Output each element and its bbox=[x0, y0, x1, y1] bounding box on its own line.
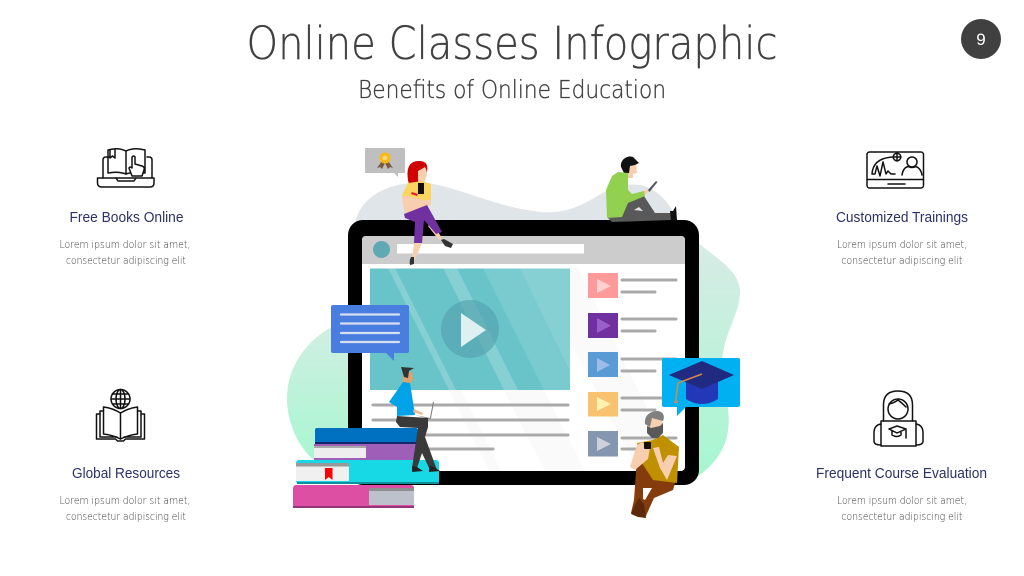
playlist item 2 bbox=[588, 313, 676, 338]
body text bbox=[60, 239, 190, 267]
heading: Free Books Online bbox=[70, 209, 184, 226]
panel: frequent course evaluation bbox=[816, 391, 987, 523]
page number badge bbox=[961, 19, 1001, 59]
book: blue bbox=[315, 428, 418, 444]
tablet bbox=[348, 220, 699, 485]
heading: Customized Trainings bbox=[836, 209, 968, 226]
playlist bbox=[588, 273, 676, 456]
playlist item 3 bbox=[588, 352, 676, 377]
tablet frame bbox=[348, 220, 699, 485]
icon: book on laptop bbox=[98, 149, 154, 187]
body text: consectetur adipiscing elit bbox=[66, 511, 186, 523]
book: pink bbox=[293, 485, 414, 508]
body text bbox=[60, 495, 190, 523]
panel: customized trainings bbox=[836, 152, 968, 267]
body text: Lorem ipsum dolor sit amet, bbox=[837, 239, 967, 251]
tablet screen bbox=[362, 236, 685, 471]
body text: consectetur adipiscing elit bbox=[842, 255, 962, 267]
background blob: grey bbox=[355, 183, 680, 225]
body text bbox=[837, 495, 967, 523]
body text bbox=[837, 239, 967, 267]
panel: free books online bbox=[60, 149, 190, 267]
body text: consectetur adipiscing elit bbox=[66, 255, 186, 267]
browser bar bbox=[362, 236, 685, 264]
body text: Lorem ipsum dolor sit amet, bbox=[837, 495, 967, 507]
title: Online Classes Infographic bbox=[246, 17, 778, 70]
body text: Lorem ipsum dolor sit amet, bbox=[60, 495, 190, 507]
book: purple bbox=[314, 444, 416, 460]
person: bearded man with phone bbox=[630, 411, 679, 518]
playlist item 1 bbox=[588, 273, 676, 298]
book: cyan with bookmark bbox=[296, 460, 439, 484]
speech bubble: medal bbox=[365, 148, 405, 177]
heading: Global Resources bbox=[72, 465, 180, 482]
background blob: green left bbox=[287, 318, 352, 470]
play button bbox=[441, 300, 499, 358]
video panel bbox=[370, 268, 581, 390]
icon: student with laptop bbox=[874, 391, 923, 446]
panel: global resources bbox=[60, 390, 190, 523]
page number badge: 9 bbox=[976, 30, 986, 49]
book stack bbox=[293, 428, 439, 508]
body text: consectetur adipiscing elit bbox=[842, 511, 962, 523]
icon: monitor with trainer bbox=[867, 152, 924, 188]
person: man with laptop on books bbox=[389, 367, 440, 472]
illustration: online class scene bbox=[287, 148, 740, 518]
person: woman on tablet bbox=[402, 161, 453, 265]
speech bubble: graduation cap bbox=[662, 358, 740, 416]
subtitle: Benefits of Online Education bbox=[358, 75, 666, 104]
playlist item 5 bbox=[588, 431, 676, 456]
browser globe bbox=[373, 241, 390, 258]
body text: Lorem ipsum dolor sit amet, bbox=[60, 239, 190, 251]
speech bubble: text bbox=[331, 305, 409, 361]
heading: Frequent Course Evaluation bbox=[816, 465, 987, 482]
text lines under video bbox=[373, 405, 568, 449]
address bar bbox=[397, 244, 584, 254]
background blob: green right bbox=[695, 240, 740, 478]
playlist item 4 bbox=[588, 392, 664, 416]
icon: book with globe bbox=[96, 390, 144, 441]
person: man with tablet on top bbox=[606, 156, 677, 222]
faint light streaks bbox=[449, 268, 678, 471]
